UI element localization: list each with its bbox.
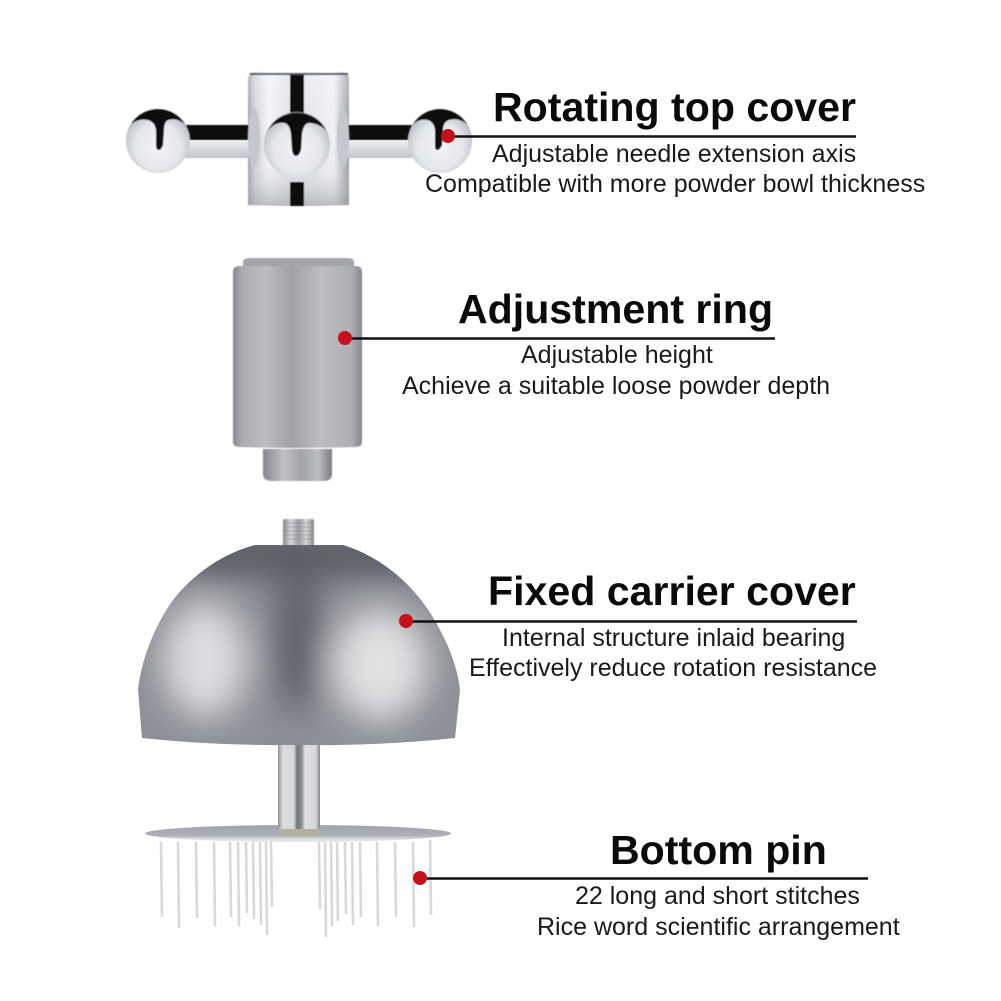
marker dot: [338, 331, 352, 345]
callout: adjustment ring: [338, 286, 830, 400]
description: [537, 882, 900, 941]
pins: [161, 840, 431, 937]
dome: [138, 545, 460, 746]
description: Internal structure inlaid bearing: [502, 624, 845, 652]
plate: [145, 825, 451, 842]
description: Compatible with more powder bowl thickness: [425, 170, 925, 198]
part: fixed carrier cover: [130, 519, 470, 750]
threaded post: [283, 519, 314, 547]
description: [469, 624, 877, 682]
heading: Fixed carrier cover: [488, 568, 856, 614]
description: [425, 140, 925, 198]
marker dot: [413, 871, 427, 885]
marker dot: [441, 129, 455, 143]
description: 22 long and short stitches: [575, 882, 860, 910]
callout: fixed carrier cover: [399, 568, 877, 682]
description: Rice word scientific arrangement: [537, 913, 900, 941]
description: Achieve a suitable loose powder depth: [402, 372, 830, 400]
heading: Bottom pin: [610, 827, 827, 873]
stem: [278, 745, 320, 830]
part: rotating top cover: [126, 72, 472, 206]
part: adjustment ring: [233, 258, 362, 481]
description: Adjustable needle extension axis: [492, 140, 856, 168]
part: bottom pin: [145, 745, 451, 937]
heading: Rotating top cover: [493, 84, 856, 130]
description: Adjustable height: [521, 341, 713, 369]
heading: Adjustment ring: [458, 286, 773, 332]
marker dot: [399, 614, 413, 628]
callout: rotating top cover: [425, 84, 925, 198]
description: Effectively reduce rotation resistance: [469, 654, 877, 682]
callout: bottom pin: [413, 827, 900, 941]
description: [402, 341, 830, 400]
